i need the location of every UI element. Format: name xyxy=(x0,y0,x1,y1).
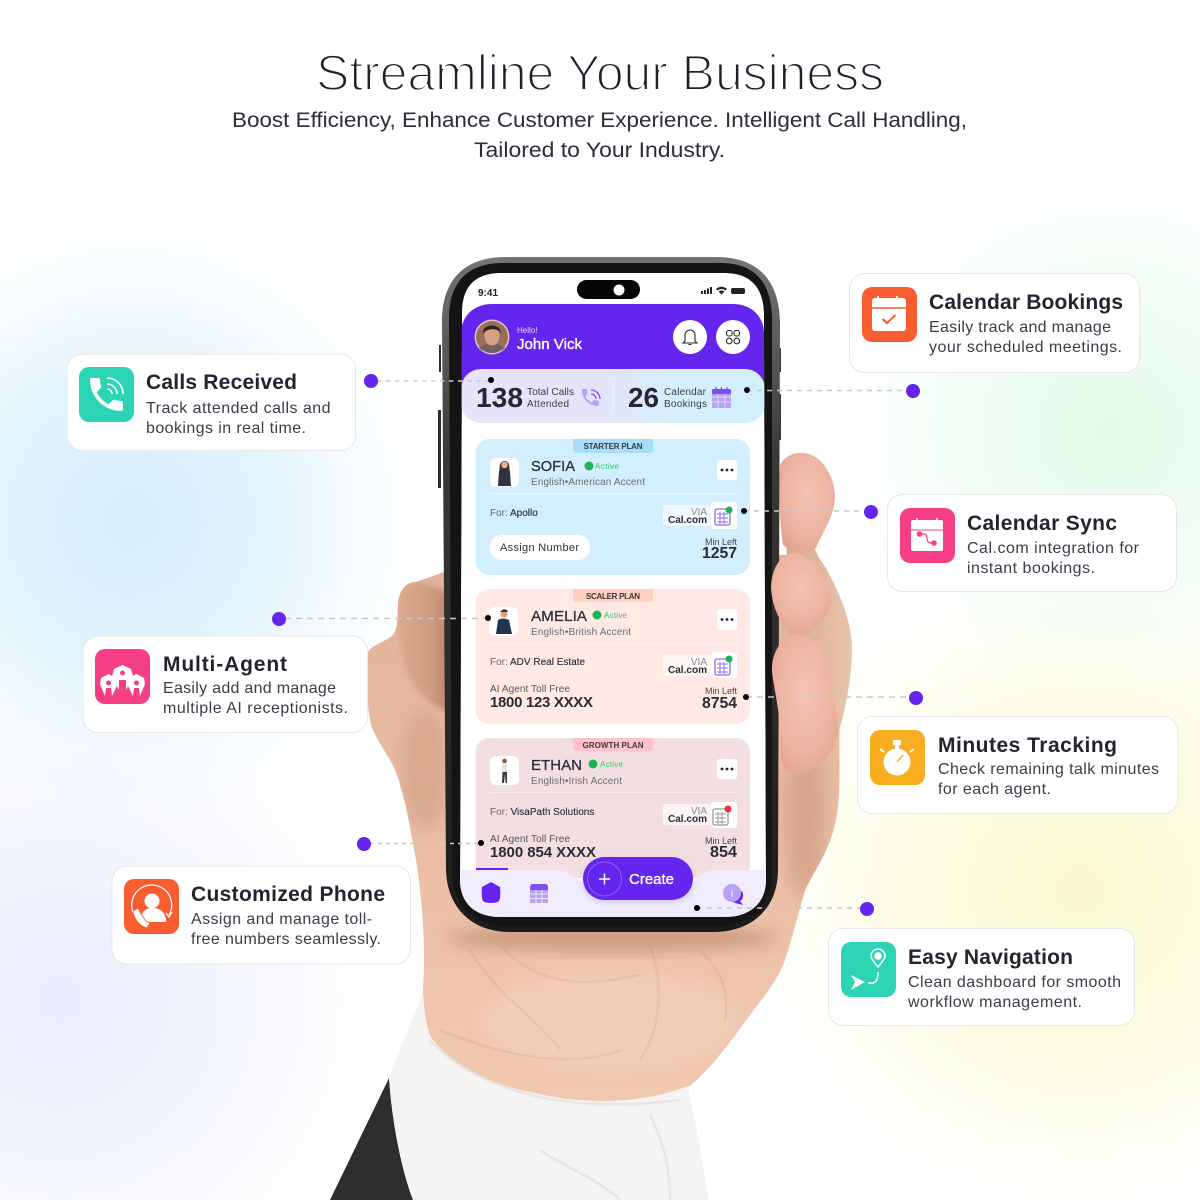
palm xyxy=(367,553,852,1101)
icon: calendar xyxy=(530,884,548,903)
minutes left: Min Left xyxy=(705,686,737,696)
heading: Customized Phone xyxy=(191,883,385,906)
fingers xyxy=(771,453,852,775)
client: For: VisaPath Solutions xyxy=(490,807,594,818)
agent avatar xyxy=(489,607,518,636)
agent card: Sofia xyxy=(476,439,750,575)
frame xyxy=(442,257,780,932)
assign button xyxy=(490,535,590,560)
calendar integration: Cal.com xyxy=(668,664,707,676)
plan tab xyxy=(573,439,653,453)
heading: Calendar Sync xyxy=(967,512,1117,535)
palm shading xyxy=(398,582,825,1070)
notification button xyxy=(673,320,707,354)
subtitle xyxy=(232,109,967,162)
status: Active xyxy=(604,611,628,620)
description: Track attended calls and xyxy=(146,400,330,417)
icon: person with phone xyxy=(124,879,179,934)
status xyxy=(584,462,620,471)
description xyxy=(907,974,1121,1011)
toll free number: AI Agent Toll Free xyxy=(490,834,570,845)
stat: total calls: Total Calls xyxy=(527,387,574,398)
status xyxy=(588,760,624,769)
bezel xyxy=(449,263,772,926)
panel: easy navigation xyxy=(828,928,1134,1026)
heading: Calendar Bookings xyxy=(929,291,1123,314)
connector: customized phone xyxy=(357,837,484,851)
stat: total calls: Attended xyxy=(527,399,569,410)
connector: calls received xyxy=(364,374,494,388)
panel: calendar sync xyxy=(888,494,1176,592)
language: English•British Accent xyxy=(531,627,631,638)
calendar integration: VIA xyxy=(691,657,707,668)
stat: calendar bookings: 26 xyxy=(628,382,659,413)
menu xyxy=(717,609,737,630)
bottom navigation bar xyxy=(460,869,766,917)
client: For: Apollo xyxy=(490,508,538,519)
icon: calendar check xyxy=(862,287,917,342)
minutes left: Min Left xyxy=(705,537,737,547)
language: English•American Accent xyxy=(531,477,645,488)
description: for each agent. xyxy=(938,781,1051,798)
minutes left xyxy=(703,538,737,558)
finger 3 xyxy=(772,634,838,775)
stats bar xyxy=(461,369,765,423)
icon: chat info xyxy=(723,884,743,905)
jacket sleeve xyxy=(330,1078,413,1200)
header band xyxy=(461,304,764,400)
agent name: SOFIA xyxy=(531,458,575,475)
title: Streamline Your Business xyxy=(316,45,884,101)
agent avatar xyxy=(490,458,519,487)
panel: calendar bookings xyxy=(850,274,1140,372)
calendar integration xyxy=(663,802,737,828)
heading: Calls Received xyxy=(146,371,297,394)
status xyxy=(592,610,628,620)
calendar integration: Cal.com xyxy=(668,514,707,526)
stat: calendar bookings: Bookings xyxy=(664,399,707,410)
description: Easily add and manage xyxy=(163,680,336,697)
cuff folds xyxy=(429,1040,680,1200)
minutes left xyxy=(702,688,737,708)
phone xyxy=(438,257,781,932)
icon: calendar sync xyxy=(900,508,955,563)
icon: chat info: i xyxy=(731,888,733,900)
plan tab xyxy=(573,738,653,751)
plan tab: SCALER PLAN xyxy=(586,592,640,601)
assign button: Assign Number xyxy=(500,542,579,554)
status icons xyxy=(701,287,745,294)
description: multiple AI receptionists. xyxy=(163,700,348,717)
connector: calendar sync xyxy=(741,505,878,519)
client: For: ADV Real Estate xyxy=(490,657,585,668)
description: Assign and manage toll- xyxy=(191,911,372,928)
plan tab: GROWTH PLAN xyxy=(582,741,644,750)
description: bookings in real time. xyxy=(146,420,306,437)
dynamic island xyxy=(577,280,640,299)
stat: calendar bookings xyxy=(628,387,731,409)
description xyxy=(191,911,381,948)
user avatar xyxy=(474,320,510,354)
calendar integration xyxy=(663,502,737,529)
toll free number xyxy=(490,834,596,861)
status: Active xyxy=(600,760,624,769)
connector: calendar bookings xyxy=(744,384,920,398)
toll free number: AI Agent Toll Free xyxy=(490,684,570,695)
agent card: Ethan xyxy=(476,738,750,878)
description xyxy=(146,400,330,437)
description xyxy=(163,680,348,717)
icon: phone signal xyxy=(79,367,134,422)
description: your scheduled meetings. xyxy=(929,339,1122,356)
description: workflow management. xyxy=(907,994,1082,1011)
greeting: Hello! xyxy=(517,326,537,335)
plan tab xyxy=(573,589,653,602)
agent avatar xyxy=(490,756,519,785)
toll free number: 1800 123 XXXX xyxy=(490,694,593,711)
heading: Easy Navigation xyxy=(908,946,1073,969)
plan tab: STARTER PLAN xyxy=(584,442,643,451)
left side buttons xyxy=(438,345,441,488)
icon: navigation pin xyxy=(841,942,896,997)
menu xyxy=(717,460,737,480)
icon: home xyxy=(482,882,500,903)
shirt cuff xyxy=(389,993,709,1200)
stat: total calls xyxy=(478,388,601,408)
stat: total calls: 138 xyxy=(476,382,523,413)
subtitle: Boost Efficiency, Enhance Customer Experience. Intelligent Call Handling, xyxy=(232,109,967,132)
description: Check remaining talk minutes xyxy=(938,761,1159,778)
menu xyxy=(717,759,737,779)
create button: Create xyxy=(629,871,674,888)
agent name: ETHAN xyxy=(531,757,582,774)
description: Easily track and manage xyxy=(929,319,1111,336)
menu button xyxy=(716,320,750,354)
language: English•Irish Accent xyxy=(531,776,622,787)
hand holding phone xyxy=(330,553,852,1200)
icon: agents xyxy=(95,649,150,704)
panel: calls received xyxy=(67,354,356,450)
minutes left: 8754 xyxy=(702,695,737,712)
panel: minutes tracking xyxy=(858,716,1178,814)
stat: calendar bookings: Calendar xyxy=(664,387,707,398)
toll free number: 1800 854 XXXX xyxy=(490,844,596,861)
description: Cal.com integration for xyxy=(967,540,1140,557)
screen xyxy=(460,273,766,917)
icon: stopwatch xyxy=(870,730,925,785)
subtitle: Tailored to Your Industry. xyxy=(474,139,725,162)
finger bases xyxy=(786,538,852,735)
description xyxy=(929,319,1122,356)
calendar integration: Cal.com xyxy=(668,813,707,825)
minutes left: 854 xyxy=(710,844,737,861)
create button xyxy=(583,857,693,902)
minutes left xyxy=(705,836,737,861)
right side buttons xyxy=(779,348,781,440)
calendar integration: VIA xyxy=(691,806,707,817)
toll free number xyxy=(490,684,593,707)
calendar integration: VIA xyxy=(691,507,707,518)
agent card: Amelia xyxy=(476,589,750,724)
minutes left: 1257 xyxy=(702,545,737,562)
description xyxy=(967,540,1140,577)
finger 1 xyxy=(779,453,835,551)
finger 2 xyxy=(771,553,831,633)
minutes left: Min Left xyxy=(705,836,737,846)
heading: Minutes Tracking xyxy=(938,734,1117,757)
heading: Multi-Agent xyxy=(163,653,287,676)
calendar integration xyxy=(663,652,737,678)
status: Active xyxy=(595,462,620,471)
description: Clean dashboard for smooth xyxy=(908,974,1121,991)
user name: John Vick xyxy=(517,336,582,353)
description xyxy=(938,761,1159,798)
panel: customized phone xyxy=(112,866,410,964)
connector: multi-agent xyxy=(272,612,491,626)
agent name: AMELIA xyxy=(531,608,587,625)
connector: minutes tracking xyxy=(743,691,923,705)
description: free numbers seamlessly. xyxy=(191,931,381,948)
description: instant bookings. xyxy=(967,560,1095,577)
panel: multi-agent xyxy=(83,636,368,732)
status time: 9:41 xyxy=(478,288,498,299)
connector: easy navigation xyxy=(694,902,874,916)
